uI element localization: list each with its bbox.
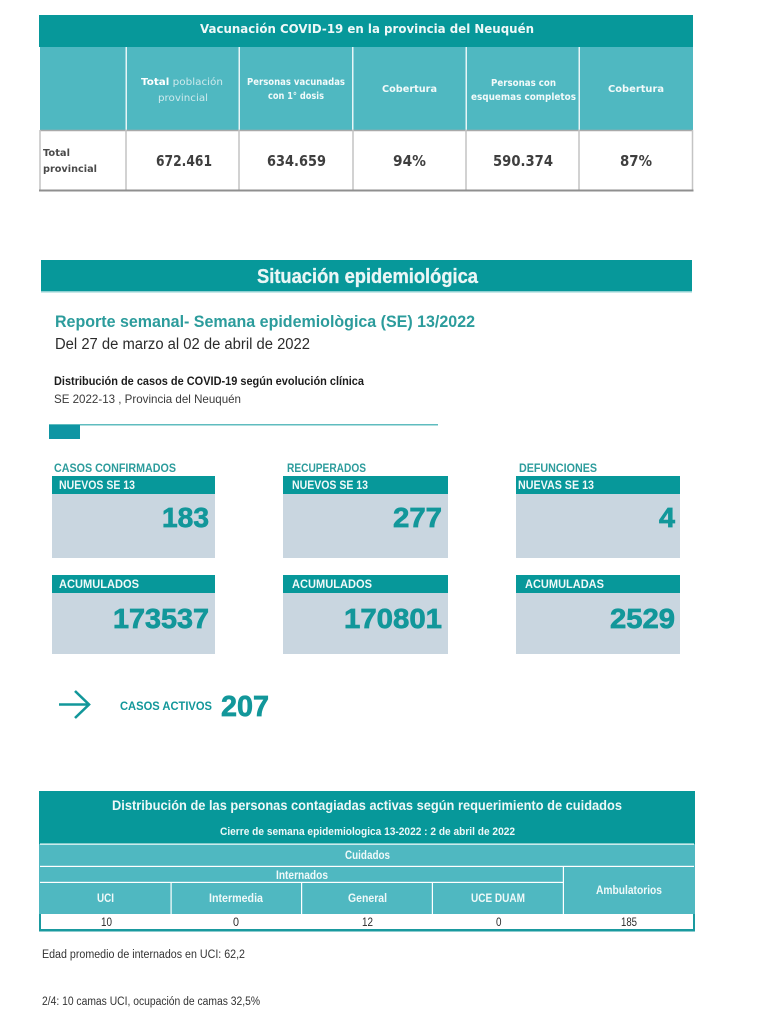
- care table title: Distribución de las personas contagiadas activas según requerimiento de cuidados: [112, 797, 622, 813]
- report title: Reporte semanal- Semana epidemiològica (SE) 13/2022: [55, 312, 475, 331]
- vaccination table data row: Total: [43, 148, 70, 159]
- section banner: Situación epidemiológica: [41, 260, 692, 292]
- report heading: [55, 312, 475, 353]
- active cases label: CASOS ACTIVOS: [120, 701, 212, 713]
- card: deaths accumulated: ACUMULADAS: [525, 577, 604, 591]
- distribution subtitle: [54, 374, 364, 406]
- care table header cells: Cuidados: [345, 850, 390, 862]
- casos confirmados heading: CASOS CONFIRMADOS: [54, 463, 176, 475]
- vaccination table title bar: [39, 15, 693, 47]
- vaccination table column headers: Cobertura: [382, 84, 437, 95]
- note: ICU bed occupancy: 2/4: 10 camas UCI, ocupación de camas 32,5%: [42, 996, 260, 1008]
- care table values row: 12: [362, 917, 373, 929]
- care table title: Cierre de semana epidemiologica 13-2022 : 2 de abril de 2022: [220, 826, 515, 838]
- report dates: Del 27 de marzo al 02 de abril de 2022: [55, 336, 310, 353]
- vaccination table title bar: Vacunación COVID-19 en la provincia del Neuquén: [200, 22, 534, 36]
- active cases callout: [59, 691, 269, 723]
- care table header cells: Internados: [276, 870, 328, 882]
- card: confirmed accumulated: ACUMULADOS: [59, 577, 139, 591]
- care table header cells: Ambulatorios: [596, 885, 662, 897]
- care table values row: 10: [101, 917, 112, 929]
- card: recovered accumulated: [283, 575, 448, 654]
- vaccination table column headers: Total población: [141, 76, 223, 88]
- card: confirmed accumulated: [52, 575, 215, 654]
- vaccination table data row: 672.461: [156, 152, 212, 170]
- card: confirmed new: 183: [162, 502, 209, 533]
- distribution subtitle: SE 2022-13 , Provincia del Neuquén: [54, 392, 241, 406]
- vaccination table data row: 634.659: [267, 152, 326, 170]
- panel: casos confirmados: [52, 463, 215, 654]
- vaccination table column headers: esquemas completos: [471, 92, 576, 103]
- vaccination table column headers: Cobertura: [608, 84, 664, 95]
- distribution subtitle: Distribución de casos de COVID-19 según evolución clínica: [54, 374, 364, 388]
- note: average age: Edad promedio de internados en UCI: 62,2: [42, 949, 245, 961]
- vaccination table data row: [39, 130, 694, 192]
- vaccination table data row: 590.374: [493, 152, 553, 170]
- panel: recuperados: [283, 463, 448, 654]
- vaccination table column headers: con 1° dosis: [268, 91, 324, 102]
- care table header cells: UCE DUAM: [471, 893, 525, 905]
- vaccination table data row: provincial: [43, 164, 97, 175]
- subtitle rule with tab: [49, 424, 438, 439]
- care table values row: [39, 914, 695, 932]
- card: recovered new: 277: [393, 502, 442, 533]
- panel: vaccination table: [39, 15, 694, 192]
- active cases number: 207: [221, 691, 269, 723]
- card: deaths accumulated: [516, 575, 680, 654]
- card: recovered accumulated: 170801: [344, 603, 442, 634]
- panel: defunciones: [516, 463, 680, 654]
- care table values row: 185: [621, 917, 637, 929]
- care table values row: 0: [496, 917, 502, 929]
- card: deaths new: 4: [659, 502, 675, 533]
- defunciones heading: DEFUNCIONES: [519, 463, 597, 475]
- section banner: Situación epidemiológica: Situación epidemiológica: [257, 266, 479, 288]
- card: deaths accumulated: 2529: [610, 603, 675, 634]
- vaccination table data row: 87%: [620, 152, 652, 170]
- card: confirmed accumulated: 173537: [113, 603, 209, 634]
- card: deaths new: NUEVAS SE 13: [518, 480, 594, 492]
- recuperados heading: RECUPERADOS: [287, 463, 366, 475]
- card: confirmed new: NUEVOS SE 13: [59, 480, 135, 492]
- card: confirmed new: [52, 476, 215, 558]
- care table header cells: UCI: [97, 893, 114, 905]
- care table header cells: [39, 844, 695, 914]
- care table values row: 0: [233, 917, 239, 929]
- care table title: [39, 791, 695, 844]
- care table header cells: General: [348, 893, 387, 905]
- vaccination table data row: 94%: [393, 152, 426, 170]
- icon: arrow: [59, 691, 89, 718]
- panel: care requirement table: [39, 791, 695, 932]
- card: recovered new: NUEVOS SE 13: [292, 480, 368, 492]
- vaccination table column headers: Personas con: [491, 78, 556, 89]
- vaccination table column headers: Personas vacunadas: [247, 77, 345, 88]
- card: deaths new: [516, 476, 680, 558]
- vaccination table column headers: [40, 47, 693, 130]
- card: recovered accumulated: ACUMULADOS: [292, 577, 372, 591]
- vaccination table column headers: provincial: [158, 93, 208, 104]
- card: recovered new: [283, 476, 448, 558]
- care table header cells: Intermedia: [209, 893, 264, 905]
